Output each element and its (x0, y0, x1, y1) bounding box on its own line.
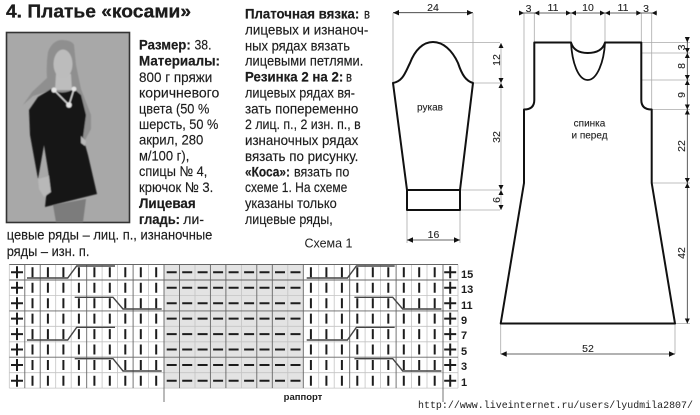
row numbers: 9 (461, 315, 467, 327)
text block: stitches (245, 6, 370, 227)
knit and purl symbols (11, 266, 456, 387)
dress dimension lines (501, 13, 687, 354)
text block: stitches: изнаночных рядах (245, 132, 358, 148)
purl stitch background (164, 264, 303, 388)
sleeve labels: 6 (491, 197, 503, 203)
dress labels: 10 (582, 2, 594, 14)
text block: stitches: лицевых рядах вя- (245, 84, 355, 100)
chart: knitting scheme 1 (9, 264, 473, 403)
dress front neckline (571, 42, 605, 80)
text block: materials: коричневого (139, 84, 220, 100)
row numbers: 15 (461, 269, 473, 281)
text block: stitches: 2 лиц. п., 2 изн. п., в (245, 116, 361, 132)
text block: materials: гладь: (139, 211, 180, 227)
dress outline (501, 42, 675, 324)
text block: stitches: лицевые ряды, (245, 211, 333, 227)
text block: materials: Лицевая (139, 195, 196, 211)
icon: neck (55, 74, 72, 90)
heading: chart title: Схема 1 (304, 236, 352, 250)
text block: stitches: Платочная вязка: (245, 6, 359, 22)
dress labels: 52 (582, 343, 594, 355)
sleeve dimension extension lines (393, 13, 501, 243)
sleeve labels: 24 (427, 2, 439, 14)
cable crossings (27, 266, 441, 371)
text block: stitches: лицевых и изнаноч- (245, 22, 369, 38)
row numbers: 11 (461, 300, 473, 312)
sleeve labels: 32 (491, 131, 503, 143)
dress labels: 3 (643, 3, 649, 15)
text block: materials (7, 36, 220, 259)
watermark url: http://www.liveinternet.ru/users/lyudmila2807/ (418, 400, 693, 412)
text block: materials: крючок № 3. (139, 179, 213, 195)
dress labels: спинка (574, 118, 606, 130)
text block: stitches: зать попеременно (245, 100, 358, 116)
dress labels: 3 (526, 3, 532, 15)
text block: stitches: ных рядах вязать (245, 38, 350, 54)
text block: stitches: в (364, 6, 370, 22)
sleeve dimension arrows (393, 13, 473, 240)
text block: materials: цвета (50 % (139, 100, 209, 116)
text block: stitches: схеме 1. На схеме (245, 179, 347, 195)
sleeve arrowheads (393, 10, 504, 243)
dress labels: 11 (618, 2, 629, 14)
text block: stitches: вязать по рисунку. (245, 148, 358, 164)
dress labels: 42 (676, 247, 688, 259)
dress pattern: back and front (501, 2, 690, 357)
photo: woman in dark dress (6, 32, 130, 222)
sleeve cuff line (407, 189, 460, 191)
sleeve labels: 12 (491, 54, 503, 66)
icon: hands (38, 136, 86, 197)
row numbers: 1 (461, 377, 467, 389)
row numbers (461, 269, 473, 389)
text block: materials: Размер: (139, 36, 191, 52)
text block: materials: спицы № 4, (139, 163, 207, 179)
dress labels: 22 (676, 140, 688, 152)
text block: stitches: Резинка 2 на 2: (245, 68, 343, 84)
icon: necklace (54, 89, 74, 105)
dress labels: и перед (571, 130, 608, 142)
row numbers: 5 (461, 346, 467, 358)
text block: stitches: вязать по (294, 164, 349, 180)
dress dimension extension lines (501, 13, 690, 354)
icon: legs (53, 199, 86, 222)
sleeve labels (417, 2, 503, 241)
text block: materials: акрил, 280 (139, 132, 203, 148)
sleeve outline (393, 42, 473, 210)
row numbers: 13 (461, 284, 473, 296)
text block: materials: шерсть, 50 % (139, 116, 218, 132)
grid lines (9, 264, 458, 388)
row numbers: 3 (461, 361, 467, 373)
dress labels: 3 (676, 44, 688, 50)
text block: stitches: в (346, 68, 352, 84)
icon: hair (23, 40, 91, 142)
repeat label: раппорт (284, 392, 323, 403)
text block: materials: 800 г пряжи (139, 69, 212, 85)
dress arrowheads (501, 10, 690, 357)
dress labels: 11 (548, 2, 559, 14)
title: 4. Платье «косами» (6, 2, 191, 22)
sleeve labels: рукав (417, 102, 443, 114)
text block: materials: ряды – изн. п. (7, 243, 89, 259)
row numbers: 7 (461, 330, 467, 342)
text block: materials: Материалы: (139, 52, 220, 68)
text block: stitches: «Коса»: (245, 164, 290, 180)
text block: materials: ли- (183, 211, 204, 227)
dress labels: 9 (676, 92, 688, 98)
text block: stitches: указаны только (245, 195, 337, 211)
text block: materials: м/100 г), (139, 148, 189, 164)
sleeve pattern (393, 2, 504, 243)
heavy grid lines (9, 264, 458, 402)
icon: dress (29, 89, 97, 207)
text block: materials: цевые ряды – лиц. п., изнаночные (7, 226, 213, 242)
icon: face (54, 50, 72, 78)
sleeve labels: 16 (428, 229, 439, 241)
text block: stitches: лицевыми петлями. (245, 53, 363, 69)
dress labels: 8 (676, 63, 688, 69)
dress labels (526, 2, 688, 355)
text block: materials: 38. (194, 36, 212, 52)
